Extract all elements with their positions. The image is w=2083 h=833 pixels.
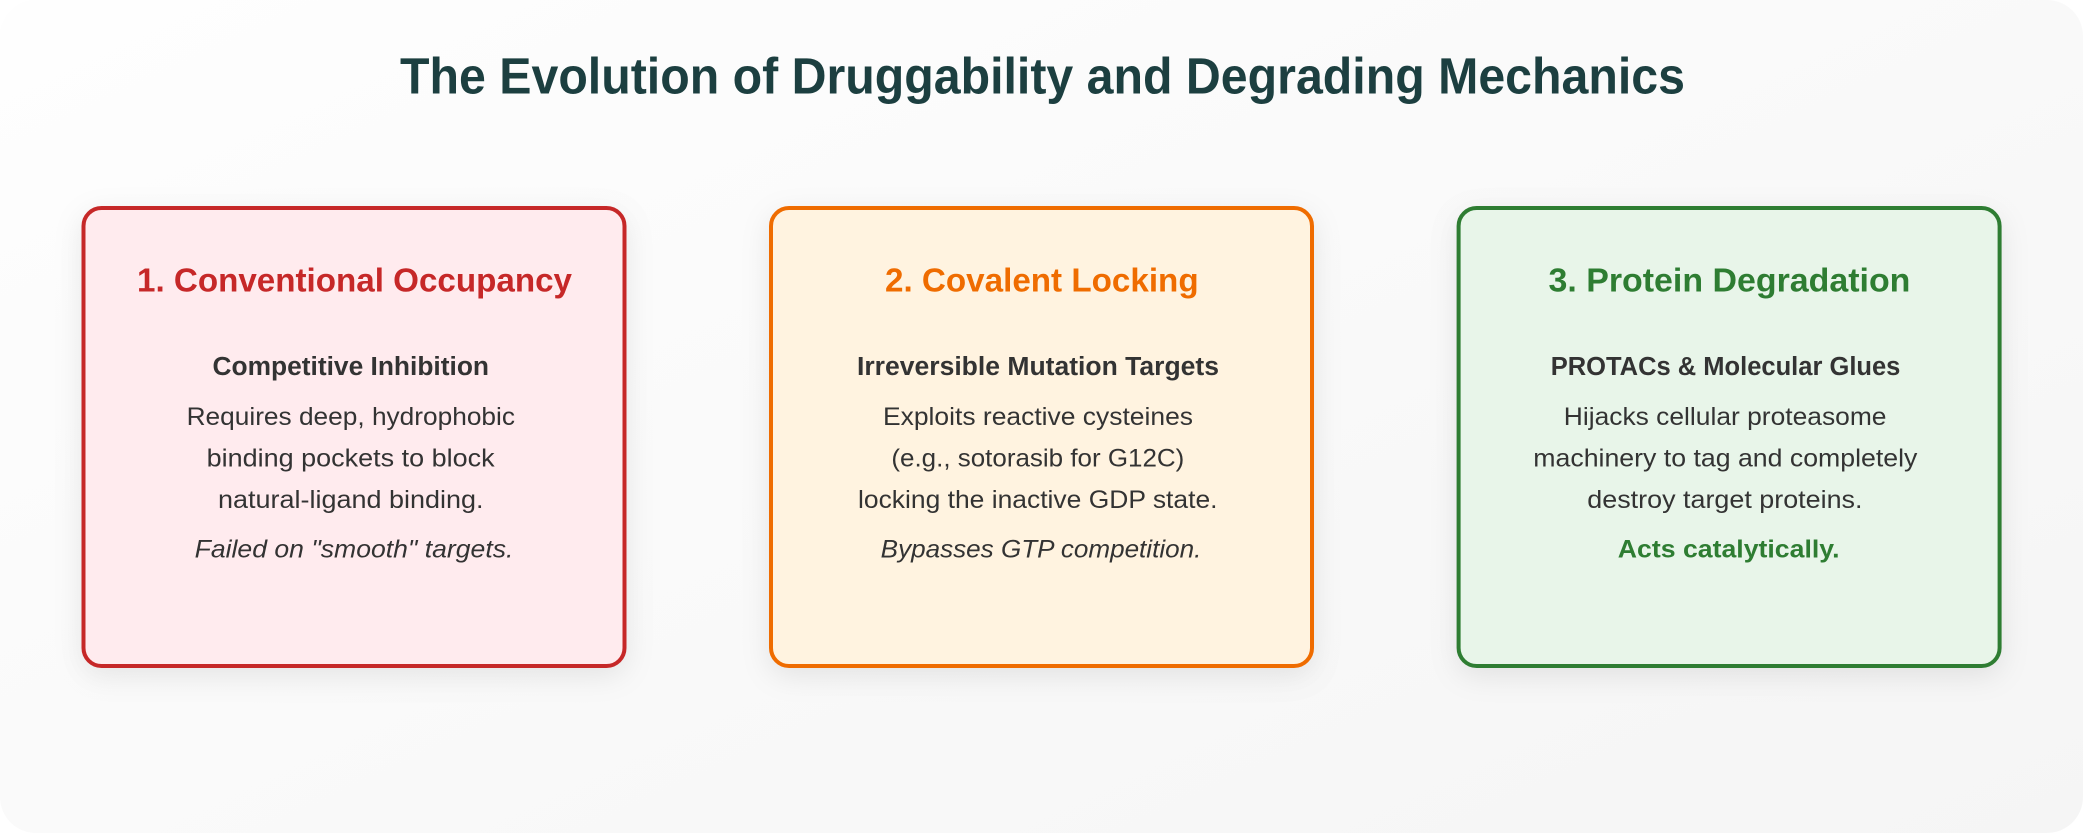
heading: covalent locking: 2. Covalent Locking: [885, 263, 1199, 300]
text block: conventional description: natural-ligand binding.: [218, 486, 484, 514]
note: failed on smooth targets: Failed on "smooth" targets.: [195, 536, 513, 564]
text block: degradation description: machinery to tag and completely: [1533, 445, 1918, 473]
text block: conventional description: binding pockets to block: [207, 445, 495, 473]
card box: protein degradation: [1459, 208, 2000, 666]
panel: protein degradation: [1459, 208, 2000, 666]
text block: degradation description: destroy target proteins.: [1587, 486, 1862, 514]
text block: covalent description: (e.g., sotorasib for G12C): [891, 445, 1184, 473]
text block: covalent description: Exploits reactive cysteines: [883, 403, 1193, 431]
text block: covalent description: [858, 403, 1218, 514]
text block: conventional description: Requires deep, hydrophobic: [187, 403, 515, 431]
subheading: competitive inhibition: Competitive Inhibition: [212, 353, 489, 381]
title: The Evolution of Druggability and Degrading Mechanics: [400, 47, 1685, 104]
card box: conventional occupancy: [84, 208, 624, 666]
text block: degradation description: Hijacks cellular proteasome: [1564, 403, 1887, 431]
heading: protein degradation: 3. Protein Degradation: [1548, 263, 1910, 300]
text block: degradation description: [1533, 403, 1918, 514]
panel: conventional occupancy: [84, 208, 624, 666]
text block: conventional description: [187, 403, 515, 514]
subheading: PROTACs and molecular glues: PROTACs & Molecular Glues: [1551, 353, 1900, 381]
panel: covalent locking: [771, 208, 1312, 666]
text block: covalent description: locking the inactive GDP state.: [858, 486, 1218, 514]
subheading: irreversible mutation targets: Irreversible Mutation Targets: [857, 353, 1219, 381]
note: bypasses GTP competition: Bypasses GTP competition.: [881, 536, 1201, 564]
heading: conventional occupancy: 1. Conventional Occupancy: [137, 263, 572, 300]
card box: covalent locking: [771, 208, 1312, 666]
note: acts catalytically: Acts catalytically.: [1618, 536, 1840, 564]
